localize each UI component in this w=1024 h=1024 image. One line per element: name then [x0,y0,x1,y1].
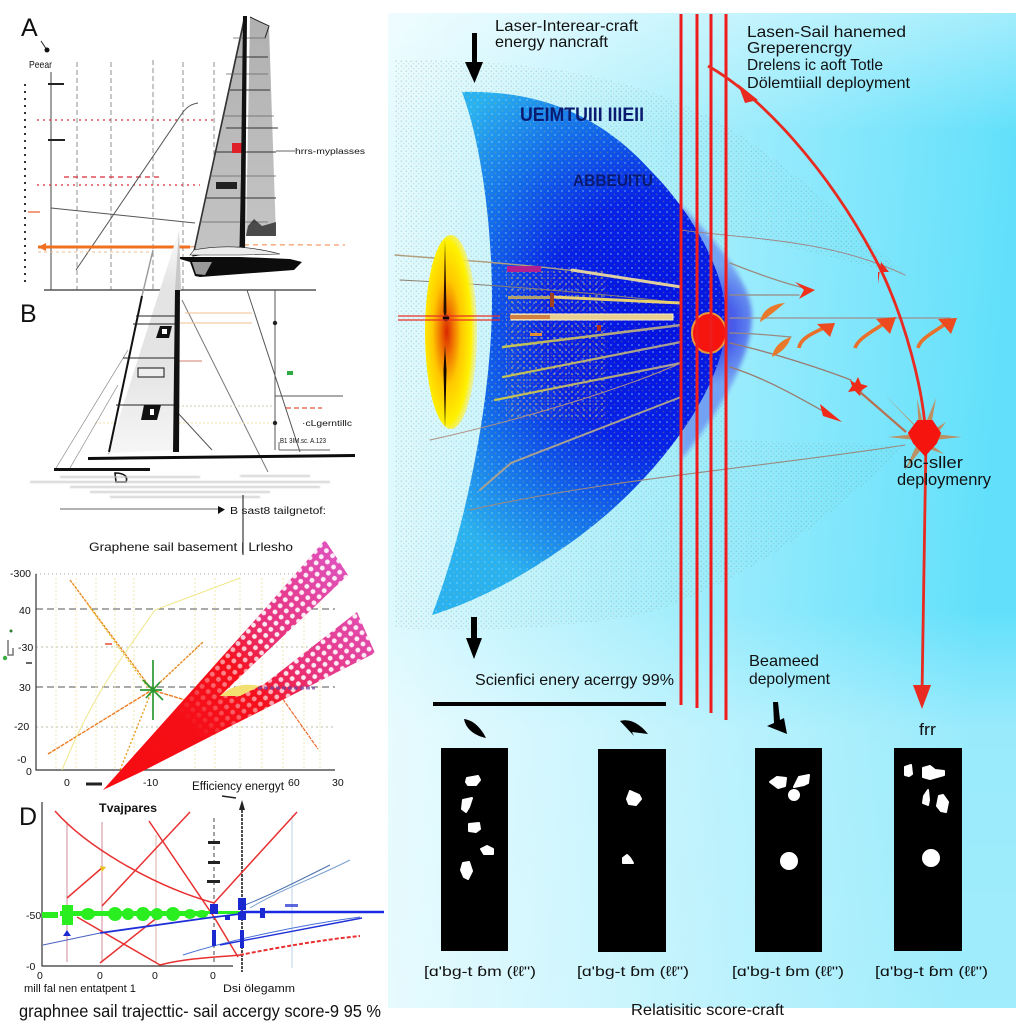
red curves [55,811,297,965]
grid and plot [25,60,345,290]
red and pink wedge [103,540,375,790]
callout line [276,150,295,152]
annotation text 1: ·cLgerntillc [302,419,352,428]
axis labels [26,910,216,982]
data overlay [258,686,315,690]
card captions [424,963,988,979]
scale arrowhead [218,506,225,514]
panel background [388,13,1016,1008]
label: deployment: bc-sller [903,453,963,472]
axis labels x: -10 [143,777,158,789]
small arrow 1 [464,719,486,738]
divider bar [433,702,666,706]
card 1 [441,748,508,951]
arrow: top black [465,33,483,83]
card captions: [ɑ'bg-t ɓm (ℓℓ") [875,963,988,979]
axis labels: -50 [26,910,41,922]
panel C: scatter chart [3,540,375,798]
axis caption left: mill fal nen entatpent 1 [24,983,136,995]
laser input line [398,316,500,320]
top label left: energy nancraft [495,34,609,51]
top label right: Drelens ic aoft Totle [747,57,883,74]
axis labels y: 0 [26,766,32,778]
small dash [222,796,236,798]
yellow marker [100,866,106,872]
pointer [41,41,47,50]
top label right: Dölemtiiall deployment [747,75,911,92]
red vertical lines [681,14,726,720]
green star burst [140,660,163,720]
scale line and arrow [60,508,218,510]
top label right: Greperencrgy [747,40,852,57]
gap highlight [220,685,260,696]
annotation dots [273,321,293,425]
top label right: Lasen-Sail hanemed [747,24,906,41]
laser bar [511,314,673,320]
axis labels x: 30 [332,777,344,789]
label: beamed deployment [749,653,831,688]
label: beamed deployment: Beameed [749,653,819,670]
top label right [747,24,911,92]
blue markers [63,898,298,948]
left axis marker [3,630,32,663]
large red curved arrow [708,66,931,709]
axis labels y: -20 [14,721,29,733]
card captions: [ɑ'bg-t ɓm (ℓℓ") [424,963,536,979]
bottom tick mark [86,782,102,786]
small arrow 2 [620,720,648,736]
panel B: sailboat [20,230,355,555]
card 4 [894,748,962,951]
label: deployment: deploymenry [897,470,991,489]
green wavy band [42,905,245,925]
dotted mesh cone [395,60,905,630]
blue lines [43,860,384,955]
axis labels y: -300 [10,568,31,580]
annotation text 2: B1 3IM.sc. A.123 [280,438,326,445]
top label left [495,18,639,51]
callout text: hrrs-myplasses [295,147,365,156]
small arrow 3 [767,702,787,734]
axis labels y: -0 [17,754,26,766]
footer strip [388,1008,1016,1024]
chart grid [36,574,335,770]
label: beamed deployment: depolyment [749,671,831,688]
sailboat A [180,16,302,277]
axes [42,802,233,966]
card captions: [ɑ'bg-t ɓm (ℓℓ") [577,963,689,979]
blue lens [432,92,752,615]
axis labels y [10,568,33,778]
axis caption right: Dsi ölegamm [223,983,295,995]
card captions: [ɑ'bg-t ɓm (ℓℓ") [732,963,844,979]
divider tick [242,495,244,555]
axis labels x [64,777,344,789]
axis labels: 0 [210,970,216,982]
panel letter D: D [19,803,37,831]
vertical markers [207,800,245,883]
axis labels: 0 [37,970,43,982]
red target circle [692,313,726,353]
axis labels x: 0 [64,777,70,789]
sailboat B [30,230,355,497]
axis labels: 0 [97,970,103,982]
axis labels: -0 [26,961,35,973]
label: fir: frr [919,720,936,739]
annotation lines [56,290,343,472]
caption B: Graphene sail basement | Lrlesho [89,540,293,554]
heading inside lens 2: ABBEUITU [573,171,653,190]
arrowhead on orange line [38,243,46,251]
vertical guides [67,810,292,972]
panel: laser beam diagram [388,13,1016,1008]
panel A: sailboat and grid [21,14,365,290]
footer caption: Relatisitic score-craft [631,1002,785,1019]
axis labels: 0 [152,970,158,982]
output arrows [760,282,957,432]
axis title: Efficiency energyt [192,781,285,793]
yellow laser spot [425,235,477,429]
axis labels y: -30 [18,642,33,654]
top label left: Laser-Interear-craft [495,18,639,35]
label: scientific energy: Scienfici enery acerrgy 99% [475,672,674,689]
card 2 [598,749,666,952]
red dashed series [240,936,360,955]
arrow: lower left black [466,617,482,659]
panel D: trajectory chart [19,800,384,1021]
panel letter A: A [21,14,38,42]
beam rays [395,230,950,510]
starburst at deployment point [885,395,962,470]
card 3 [755,748,822,952]
label: deployment [897,453,991,489]
small beam data marks [507,266,601,336]
bottom headline: graphnee sail trajecttic- sail accergy score-9 95 % [19,1001,381,1021]
orange rays [48,578,318,770]
pointer dot [44,48,50,52]
axis labels x: 60 [288,777,300,789]
axis labels y: 30 [19,682,31,694]
scale text: B sast8 tailgnetof: [230,506,326,517]
panel letter B: B [20,300,37,328]
axis labels y: 40 [19,605,31,617]
chart title: Tvajpares [99,801,157,815]
heading inside lens 1: UEIMTUIII IIIEII [520,105,644,126]
label: peak: Peear [29,59,52,71]
